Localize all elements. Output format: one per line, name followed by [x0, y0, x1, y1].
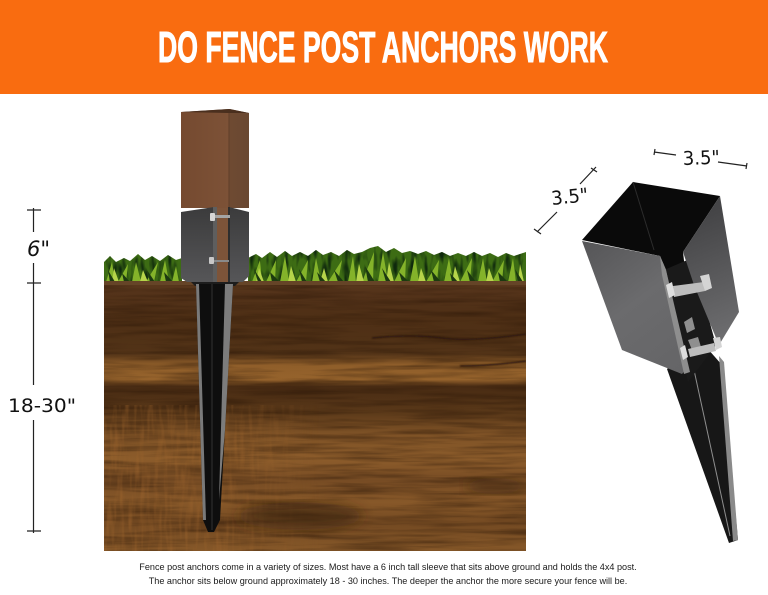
right panel: [683, 196, 739, 345]
width dimension: top: [654, 147, 747, 170]
fence post with anchor: [181, 109, 249, 532]
front panel: [582, 241, 687, 374]
interior of sleeve: [582, 182, 720, 330]
sleeve above ground: [181, 207, 249, 282]
title banner: [0, 0, 768, 94]
bolts: [209, 213, 230, 264]
height dimension lines: [27, 208, 41, 533]
caption: The anchor sits below ground approximately 18 - 30 inches. The deeper the anchor the more secure your fence will be.: [149, 576, 627, 586]
caption: [139, 562, 637, 586]
soil cross-section: [104, 281, 526, 551]
label: 3.5 inches left: 3.5": [550, 184, 589, 210]
label: 3.5 inches top: 3.5": [682, 147, 720, 170]
bolts: [666, 274, 722, 360]
wood post: [181, 109, 249, 208]
bracket gap: [664, 258, 716, 382]
grass strip: [104, 246, 526, 284]
spike in soil: [191, 282, 239, 532]
caption: Fence post anchors come in a variety of sizes. Most have a 6 inch tall sleeve that sits above ground and holds the 4x4 post.: [139, 562, 637, 572]
anchor product photo: [582, 182, 739, 543]
spike: [667, 340, 738, 543]
label: 18-30 inches: 18-30": [8, 395, 76, 417]
width dimension: left: [534, 167, 597, 234]
label: 6 inches: 6": [27, 237, 50, 261]
